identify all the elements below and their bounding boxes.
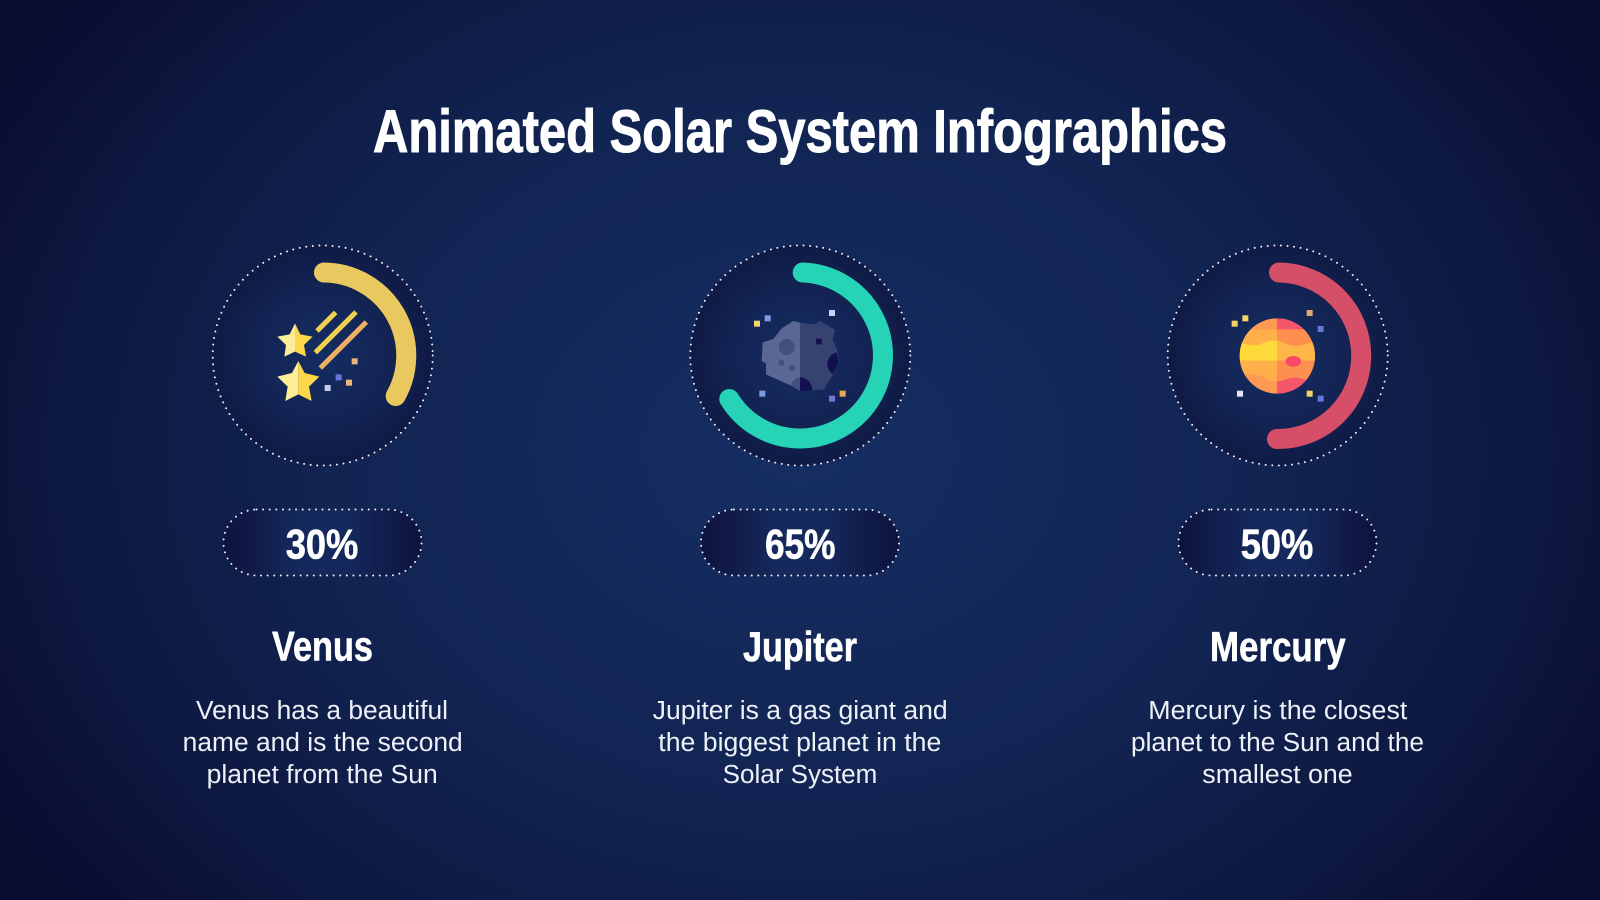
dotted circle: Venus xyxy=(213,246,433,466)
percent pill: Jupiter: 65% xyxy=(765,520,836,568)
text: Mercury description: planet to the Sun and the xyxy=(1131,729,1424,757)
text: Venus description: name and is the second xyxy=(183,729,463,757)
text: Mercury description: smallest one xyxy=(1202,761,1353,789)
percent pill: Jupiter xyxy=(701,510,899,576)
title: Animated Solar System Infographics xyxy=(373,98,1227,165)
text: Jupiter description: the biggest planet in the xyxy=(658,729,941,757)
percent pill: Mercury: 50% xyxy=(1241,520,1313,568)
dotted circle: Jupiter xyxy=(690,246,910,466)
dotted circle: Mercury xyxy=(1168,246,1388,466)
percent pill: Mercury xyxy=(1178,510,1376,576)
text: Mercury description xyxy=(1131,697,1424,789)
panel: Jupiter xyxy=(653,246,948,789)
panel: Mercury xyxy=(1131,246,1424,789)
percent pill: Venus xyxy=(224,510,422,576)
panel: Venus xyxy=(183,246,463,789)
text: Venus description: planet from the Sun xyxy=(207,761,438,789)
percent pill: Venus: 30% xyxy=(286,520,358,568)
text: Jupiter description: Solar System xyxy=(723,761,877,789)
icon: asteroid xyxy=(754,310,846,402)
icon: shooting stars xyxy=(277,312,366,401)
progress ring: Mercury 50% xyxy=(1277,272,1361,439)
text: Jupiter description xyxy=(653,697,948,789)
progress ring: Jupiter 65% xyxy=(729,272,883,438)
heading: Mercury: Mercury xyxy=(1210,623,1346,670)
progress ring: Venus 30% xyxy=(324,272,406,396)
heading: Venus: Venus xyxy=(272,623,373,670)
text: Mercury description: Mercury is the closest xyxy=(1148,697,1407,725)
icon: planet xyxy=(1232,310,1324,402)
text: Venus description xyxy=(183,697,463,789)
heading: Jupiter: Jupiter xyxy=(743,623,857,670)
text: Jupiter description: Jupiter is a gas giant and xyxy=(653,697,948,725)
text: Venus description: Venus has a beautiful xyxy=(196,697,448,725)
